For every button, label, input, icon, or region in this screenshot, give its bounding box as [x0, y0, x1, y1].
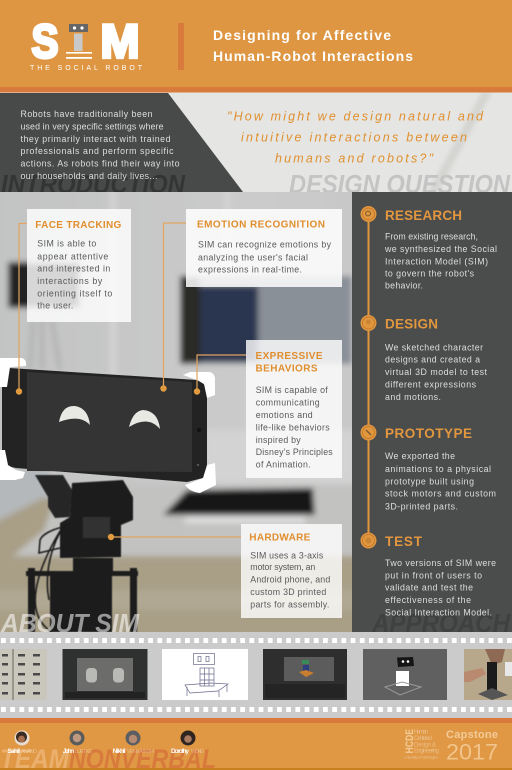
panel: introduction	[0, 93, 243, 199]
step: prototype	[360, 424, 496, 511]
step: prototype: We exported the	[385, 451, 455, 461]
icon: design light bulb	[360, 315, 376, 331]
card: hardware	[241, 524, 342, 618]
step: test: put in front of users to	[385, 570, 482, 580]
step: research: Interaction Model (SIM)	[385, 256, 488, 266]
photo: character sketches	[0, 649, 47, 700]
step: prototype: prototype built using	[385, 477, 474, 487]
step: design: designs and created a	[385, 355, 480, 365]
step: research: RESEARCH	[385, 208, 462, 223]
title	[213, 27, 413, 64]
card: face tracking: SIM is able to	[37, 239, 96, 249]
team member: Nikhil: Nikhil	[113, 748, 126, 755]
step: design: We sketched character	[385, 342, 483, 352]
introduction text: our households and daily lives...	[20, 171, 158, 181]
logo: SIM the social robot: S	[32, 14, 58, 68]
robot photo	[0, 358, 216, 632]
step: research: to govern the robot's	[385, 269, 475, 279]
icon: test target	[360, 532, 376, 548]
introduction text: Robots have traditionally been	[20, 109, 153, 119]
step: prototype: PROTOTYPE	[385, 426, 472, 441]
step: test: TEST	[385, 534, 423, 549]
header bar	[0, 0, 512, 92]
step: prototype: animations to a physical	[385, 464, 491, 474]
team member: Nikhil: VENKATESH	[127, 749, 154, 755]
top band background	[0, 92, 512, 192]
photo: 3D animation software	[263, 649, 347, 700]
introduction text: actions. As robots find their way into	[20, 158, 180, 168]
HCDE logo: Engineering	[414, 748, 439, 754]
step: design: DESIGN	[385, 316, 438, 331]
step: design: virtual 3D model to test	[385, 367, 488, 377]
step: test: Two versions of SIM were	[385, 558, 496, 568]
robot base frame	[26, 475, 138, 632]
panel: approach	[352, 192, 512, 638]
team member: Nikhil	[113, 730, 154, 755]
card: emotion recognition: EMOTION RECOGNITION	[197, 219, 325, 230]
step: research: From existing research,	[385, 231, 478, 241]
team member: John: John	[63, 748, 74, 755]
step: design: and motions.	[385, 392, 441, 402]
robot head	[0, 358, 216, 493]
step: design	[360, 315, 488, 402]
HCDE logo: HCDE	[404, 729, 416, 754]
step: test: validate and test the	[385, 583, 473, 593]
introduction text: they primarily interact with trained	[20, 134, 171, 144]
card: expressive behaviors: EXPRESSIVE	[256, 351, 323, 362]
photo: rendered robot	[363, 649, 447, 700]
step: research: behavior.	[385, 281, 423, 291]
photo: building the prototype	[464, 649, 512, 700]
photo: wireframe drawing	[162, 649, 248, 700]
quote: "How might we design natural and	[227, 110, 484, 124]
card: emotion recognition: analyzing the user's facial	[198, 252, 308, 262]
card: expressive behaviors: of Animation.	[256, 460, 311, 470]
card: hardware: custom 3D printed	[250, 587, 326, 597]
step: design: different expressions	[385, 379, 477, 389]
callout connectors	[16, 223, 246, 540]
card: expressive behaviors: emotions and	[256, 410, 313, 420]
team member: John	[63, 730, 92, 755]
capstone 2017	[446, 729, 498, 764]
card: expressive behaviors: Disney's Principles	[256, 447, 333, 457]
card: emotion recognition: SIM can recognize emotions by	[198, 240, 332, 250]
logo: SIM the social robot: THE SOCIAL ROBOT	[30, 65, 143, 72]
card: face tracking: and interested in	[37, 263, 110, 273]
HCDE logo	[404, 729, 439, 760]
card: face tracking: orienting itself to	[37, 289, 112, 299]
team member: Dorothy	[171, 730, 204, 755]
icon: right eye	[129, 410, 160, 429]
section label: about SIM: ABOUT SIM	[0, 608, 140, 638]
team member: Dorothy: WONG	[191, 749, 204, 755]
film strip gallery	[0, 632, 512, 718]
footer	[0, 718, 512, 770]
introduction text	[20, 109, 180, 181]
card: expressive behaviors: SIM is capable of	[256, 385, 328, 395]
card: emotion recognition	[186, 209, 342, 287]
team member: John: LUETKE	[75, 749, 92, 755]
title: Designing for Affective	[213, 27, 391, 43]
background photo: blurred living room	[0, 192, 352, 632]
step: test	[360, 532, 496, 618]
card: expressive behaviors	[246, 340, 342, 478]
step: test: Social Interaction Model.	[385, 608, 492, 618]
icon: research magnifier	[360, 206, 376, 222]
section label: introduction: INTRODUCTION	[1, 169, 186, 199]
HCDE logo: Human	[414, 730, 428, 736]
card: expressive behaviors: communicating	[256, 398, 320, 408]
card: hardware: SIM uses a 3-axis	[250, 550, 324, 560]
card: emotion recognition: expressions in real-time.	[198, 264, 302, 274]
quote	[227, 110, 484, 166]
card: face tracking: interactions by	[37, 276, 103, 286]
card: hardware: motor system, an	[250, 562, 315, 572]
title: Human-Robot Interactions	[213, 48, 413, 64]
logo: SIM the social robot	[30, 14, 143, 72]
card: hardware: HARDWARE	[249, 533, 311, 544]
card: expressive behaviors: life-like behaviors	[256, 422, 330, 432]
team member: Dorothy: Dorothy	[171, 748, 189, 755]
step: test: effectiveness of the	[385, 595, 471, 605]
team label	[0, 744, 216, 770]
icon: left eye	[59, 406, 90, 425]
card: expressive behaviors: BEHAVIORS	[256, 364, 318, 375]
card: expressive behaviors: inspired by	[256, 435, 301, 445]
capstone 2017: 2017	[446, 740, 498, 764]
team member: Sahil: Sahil	[8, 748, 20, 755]
quote: intuitive interactions between	[241, 130, 467, 144]
card: hardware: Android phone, and	[250, 575, 330, 585]
card: face tracking	[27, 209, 131, 322]
icon: robot letter I	[66, 24, 92, 59]
panel: design question	[228, 111, 510, 192]
HCDE logo: University of Washington	[404, 754, 438, 760]
step: research	[360, 206, 497, 291]
introduction text: professionals and perform specific	[20, 146, 174, 156]
card: face tracking: FACE TRACKING	[35, 220, 122, 231]
icon: prototype tool	[360, 424, 376, 440]
quote: humans and robots?"	[275, 152, 434, 166]
photo: 3D modelling eyes	[62, 649, 148, 700]
robot head corner bumpers	[0, 358, 216, 493]
step: research: we synthesized the Social	[384, 244, 497, 254]
team member: Sahil	[8, 730, 37, 755]
team member: Sahil: ANAND	[21, 749, 37, 755]
capstone 2017: Capstone	[446, 729, 498, 741]
card: hardware: parts for assembly.	[250, 599, 329, 609]
step: prototype: stock motors and custom	[385, 489, 496, 499]
card: face tracking: appear attentive	[37, 251, 108, 261]
step: prototype: 3D-printed parts.	[385, 501, 458, 511]
card: face tracking: the user.	[37, 301, 73, 311]
logo: SIM the social robot: M	[100, 14, 140, 68]
introduction text: used in very specific settings where	[20, 122, 164, 132]
HCDE logo: Centered	[414, 736, 432, 742]
HCDE logo: Design &	[414, 742, 436, 748]
